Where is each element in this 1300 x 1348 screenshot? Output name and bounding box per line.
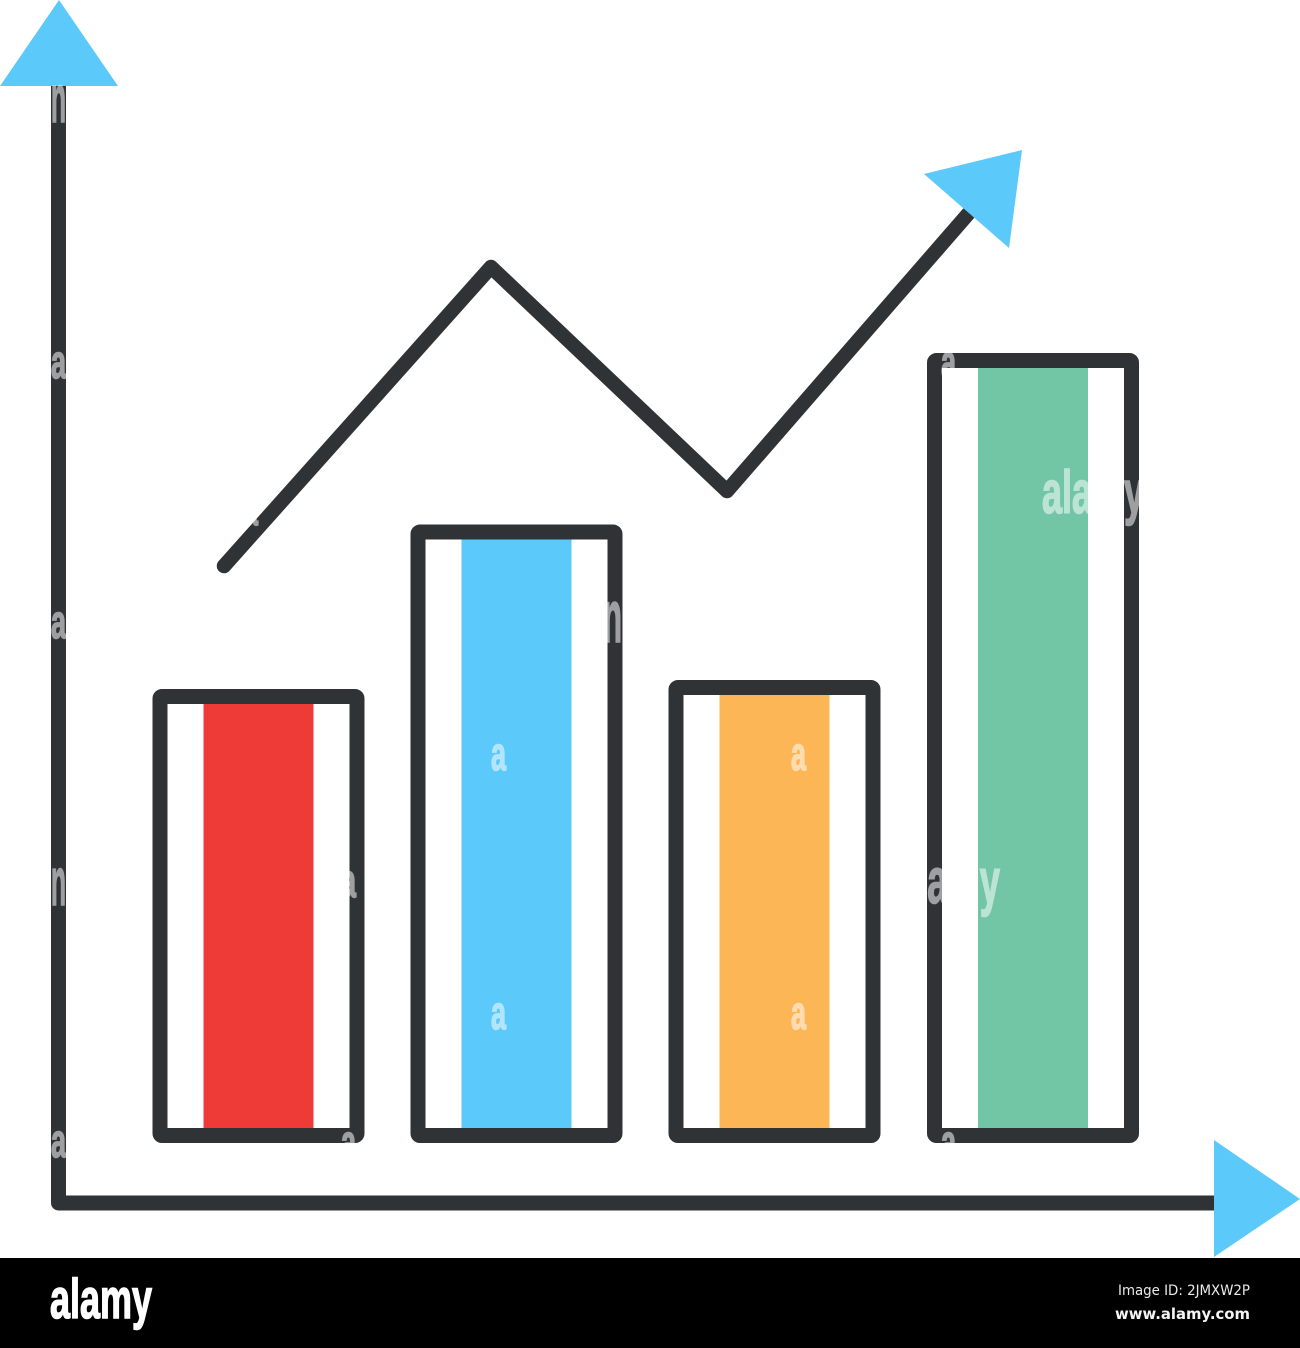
watermark: n (603, 575, 622, 658)
watermark: alamy (897, 845, 1000, 917)
watermark: a (341, 854, 356, 907)
website text: www.alamy.com (1115, 1305, 1250, 1323)
footer bar (0, 1258, 1300, 1348)
watermark (51, 61, 1144, 1168)
footer logo text: alamy (50, 1267, 152, 1330)
icon: x axis arrowhead (1214, 1140, 1300, 1257)
axes (58, 86, 1216, 1203)
image id text: Image ID: 2JMXW2P (1118, 1283, 1250, 1299)
watermark: a (791, 727, 806, 780)
watermark: a (243, 482, 258, 535)
bar: blue (418, 532, 615, 1136)
icon: trend line arrowhead (924, 150, 1022, 248)
watermark: a (941, 335, 956, 388)
watermark: a (941, 1115, 956, 1168)
watermark: n (51, 61, 66, 137)
bar: orange (676, 688, 873, 1136)
watermark: n (51, 844, 66, 920)
watermark: alamy (1042, 459, 1144, 526)
watermark: a (51, 595, 66, 648)
watermark: a (341, 1115, 356, 1168)
bar: green (934, 360, 1132, 1136)
icon: y axis arrowhead (0, 0, 118, 86)
watermark: a (51, 335, 66, 388)
bar: red (160, 696, 357, 1136)
watermark: a (491, 727, 506, 780)
watermark: a (51, 1114, 66, 1167)
trend line (224, 214, 968, 566)
watermark: a (791, 986, 806, 1039)
watermark: a (491, 986, 506, 1039)
